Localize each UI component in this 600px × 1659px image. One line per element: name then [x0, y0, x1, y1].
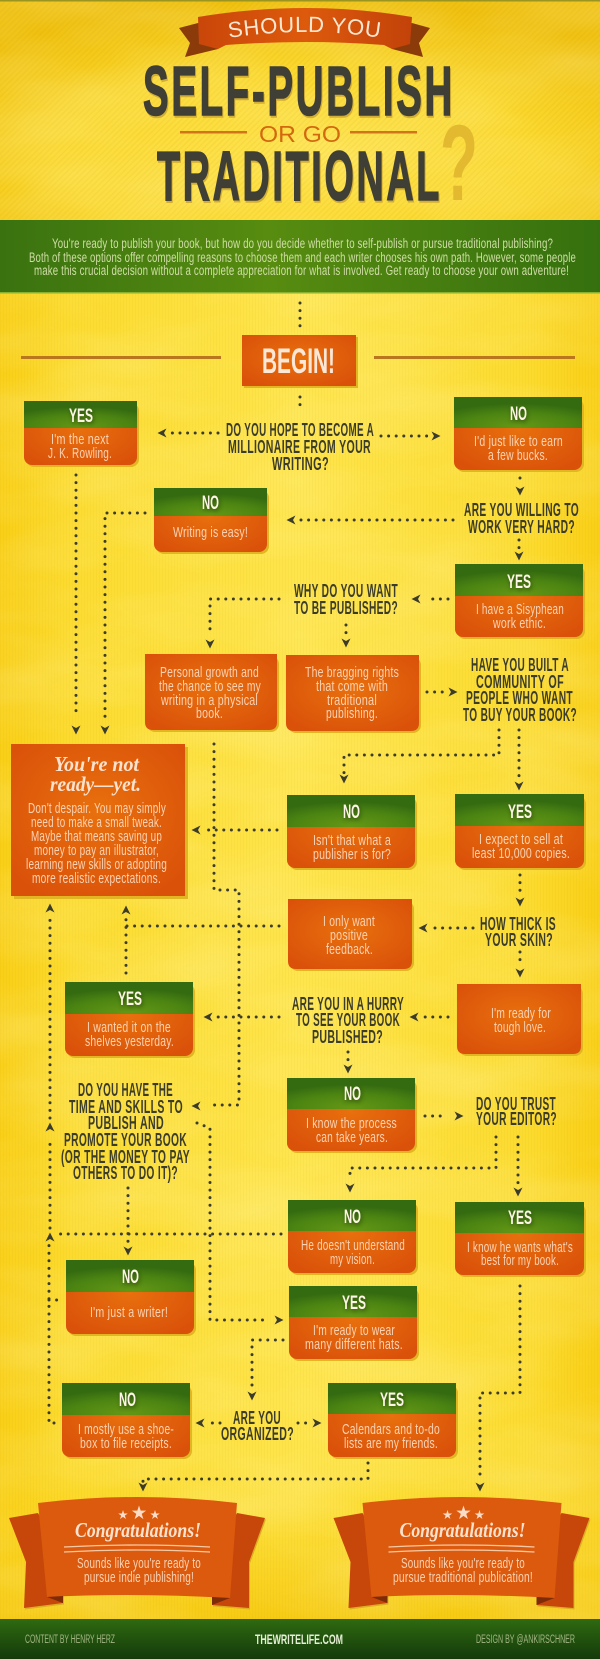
- heading: you're not ready: [50, 752, 141, 796]
- arrow: to personal growth: [206, 599, 279, 648]
- title ribbon: should you: [179, 8, 430, 57]
- connector: start: [298, 303, 302, 328]
- arrow: organized no: [196, 1418, 220, 1428]
- box: bragging rights: publishing.: [326, 706, 378, 722]
- box: bragging rights: that come with: [316, 679, 388, 695]
- box: no publisher: publisher is for?: [313, 847, 391, 863]
- box: yes sisyphean: work ethic.: [492, 616, 546, 632]
- arrow: feedback to not ready: [122, 906, 279, 973]
- box: no receipts: box to file receipts.: [80, 1436, 172, 1452]
- box: yes yesterday: shelves yesterday.: [85, 1034, 174, 1050]
- outer arrow: middle: [46, 1122, 54, 1228]
- outer arrow: upper: [46, 904, 54, 1118]
- box: personal growth: book.: [196, 706, 223, 722]
- text: indie message: [77, 1556, 201, 1586]
- question: time and skills: DO YOU HAVE THE: [78, 1079, 173, 1100]
- box: positive feedback: [288, 899, 414, 971]
- arrow: [427, 688, 458, 696]
- question: time and skills: TIME AND SKILLS TO: [69, 1096, 183, 1117]
- box: positive feedback: feedback.: [326, 942, 373, 958]
- box: yes copies: YES: [508, 801, 532, 823]
- heading: congratulations: Congratulations!: [400, 1518, 526, 1542]
- box: yes rowling: [24, 401, 139, 467]
- heading: you're not ready: ready—yet.: [50, 772, 141, 796]
- box: positive feedback: positive: [330, 928, 368, 944]
- arrow: to no publisher: [340, 730, 499, 784]
- arrow: rowling to not ready: [72, 475, 80, 734]
- body text: Don't despair. You may simply: [28, 801, 166, 817]
- box: yes sisyphean: [455, 564, 585, 639]
- box: yes calendars: [328, 1383, 458, 1459]
- begin box: [242, 335, 358, 388]
- arrow: skills to just a writer: [124, 1188, 132, 1256]
- arrow: editor no: [346, 1137, 496, 1192]
- arrow: to yes copies: [514, 730, 524, 790]
- box: no receipts: [62, 1383, 192, 1459]
- box: no writing is easy: NO: [202, 492, 219, 514]
- box: no publisher: [287, 795, 417, 870]
- box: no writing is easy: Writing is easy!: [173, 525, 248, 541]
- begin box: BEGIN!: [262, 342, 335, 381]
- arrow: [410, 1012, 448, 1022]
- box: no vision: my vision.: [330, 1252, 375, 1268]
- text: traditional message: Sounds like you're ready to: [401, 1556, 525, 1572]
- box: no receipts: I mostly use a shoe-: [78, 1422, 174, 1438]
- arrow: to yes rowling: [158, 428, 218, 438]
- box: no bucks: [454, 397, 584, 472]
- box: personal growth: writing in a physical: [160, 693, 258, 709]
- arrow: easy to not ready: [100, 513, 145, 734]
- box: no publisher: Isn't that what a: [313, 833, 391, 849]
- box: no publisher: NO: [343, 801, 360, 823]
- arrow: organized yes: [298, 1418, 322, 1428]
- box: bragging rights: traditional: [327, 693, 377, 709]
- text: indie message: pursue indie publishing!: [84, 1570, 194, 1586]
- arrow: editor yes: [514, 1137, 522, 1196]
- arrow: [516, 478, 524, 496]
- question: time and skills: OTHERS TO DO IT)?: [73, 1162, 178, 1183]
- box: yes rowling: YES: [69, 405, 93, 427]
- box: bragging rights: The bragging rights: [305, 665, 399, 681]
- question: millionaire: [226, 419, 374, 474]
- box: tough love: [457, 984, 583, 1056]
- banner: traditional publication: [334, 1497, 590, 1610]
- box: personal growth: Personal growth and: [160, 665, 259, 681]
- box: no just a writer: I'm just a writer!: [90, 1305, 168, 1321]
- arrow: [516, 875, 524, 906]
- box: yes sisyphean: YES: [507, 571, 531, 593]
- banner: indie publishing: [9, 1497, 266, 1610]
- question: time and skills: [61, 1079, 190, 1183]
- body text: need to make a small tweak.: [31, 815, 162, 831]
- divider right: [374, 356, 575, 359]
- box: no process: [287, 1078, 417, 1153]
- divider left: [21, 356, 221, 359]
- arrow: [412, 594, 448, 604]
- text: traditional message: pursue traditional publication!: [393, 1570, 533, 1586]
- box: no bucks: NO: [510, 403, 527, 425]
- credit: site: THEWRITELIFE.COM: [255, 1631, 343, 1647]
- box: no receipts: NO: [119, 1389, 136, 1411]
- question: hurry: PUBLISHED?: [312, 1026, 383, 1047]
- arrow: calendars to indie: [138, 1463, 368, 1492]
- box: no bucks: a few bucks.: [488, 448, 548, 464]
- arrow: no vision to outer: [46, 1232, 281, 1242]
- box: yes rowling: J. K. Rowling.: [48, 446, 112, 462]
- question: millionaire: MILLIONAIRE FROM YOUR: [228, 436, 371, 457]
- panel: not ready yet: [11, 744, 188, 899]
- box: no process: can take years.: [316, 1130, 388, 1146]
- arrow: to writing is easy: [286, 516, 453, 524]
- question: hurry: TO SEE YOUR BOOK: [296, 1009, 400, 1030]
- question: organized: ARE YOU: [233, 1407, 281, 1428]
- box: yes copies: I expect to sell at: [479, 832, 563, 848]
- box: positive feedback: I only want: [323, 914, 375, 930]
- box: no writing is easy: [154, 488, 269, 554]
- box: no just a writer: [66, 1260, 196, 1336]
- box: no just a writer: NO: [122, 1266, 139, 1288]
- text: traditional message: [393, 1556, 533, 1586]
- box: bragging rights: [286, 655, 421, 733]
- box: no vision: [288, 1200, 418, 1275]
- box: yes many hats: I'm ready to wear: [313, 1323, 395, 1339]
- text: should you: SHOULD YOU: [229, 16, 380, 38]
- question: hurry: [292, 993, 404, 1047]
- box: yes best for book: [455, 1202, 586, 1277]
- question: time and skills: PROMOTE YOUR BOOK: [64, 1129, 187, 1150]
- heading: you're not ready: You're not: [54, 752, 140, 776]
- box: yes many hats: [289, 1286, 419, 1361]
- box: no process: I know the process: [306, 1116, 397, 1132]
- question: community: [463, 654, 577, 725]
- question: why published: WHY DO YOU WANT: [294, 580, 398, 601]
- outer arrow: lower: [49, 1245, 57, 1423]
- body text: more realistic expectations.: [32, 871, 161, 887]
- arrow: [514, 540, 524, 560]
- heading: congratulations: Congratulations!: [75, 1518, 201, 1542]
- arrow: [418, 924, 473, 932]
- box: yes calendars: lists are my friends.: [344, 1436, 438, 1452]
- question: work hard: [464, 499, 579, 537]
- stars: [443, 1506, 484, 1519]
- subtitle: or go: OR GO: [259, 121, 341, 147]
- box: personal growth: [145, 654, 279, 732]
- box: yes best for book: best for my book.: [481, 1253, 559, 1269]
- question: why published: [294, 580, 398, 618]
- intro band: [0, 220, 600, 294]
- arrow: to bragging rights: [342, 625, 350, 648]
- stars: [118, 1506, 160, 1519]
- question: organized: [221, 1407, 294, 1444]
- question: millionaire: WRITING?: [272, 453, 329, 474]
- box: yes many hats: YES: [342, 1292, 366, 1314]
- box: tough love: tough love.: [494, 1020, 546, 1036]
- arrow: hurry to yes: [204, 1012, 279, 1022]
- box: yes yesterday: YES: [118, 988, 142, 1010]
- body text: money to pay an illustrator,: [34, 843, 159, 859]
- box: yes copies: [455, 794, 586, 870]
- box: personal growth: the chance to see my: [159, 679, 261, 695]
- box: yes yesterday: [65, 982, 195, 1058]
- question: millionaire: DO YOU HOPE TO BECOME A: [226, 419, 374, 440]
- arrow: to no bucks: [381, 432, 440, 440]
- box: no vision: NO: [344, 1206, 361, 1228]
- box: no bucks: I'd just like to earn: [474, 434, 563, 450]
- arrow: [425, 1112, 464, 1120]
- arrow: best for book to traditional: [476, 1286, 520, 1492]
- question: organized: ORGANIZED?: [221, 1423, 294, 1444]
- arrow: hats to organized: [248, 1340, 283, 1400]
- body text: learning new skills or adopting: [26, 857, 167, 873]
- question: trust editor: [476, 1093, 557, 1129]
- box: yes rowling: I'm the next: [51, 432, 109, 448]
- question: time and skills: (OR THE MONEY TO PAY: [61, 1146, 190, 1167]
- box: yes calendars: YES: [380, 1389, 404, 1411]
- connector: [298, 397, 302, 412]
- box: no vision: He doesn't understand: [301, 1238, 405, 1254]
- box: yes best for book: YES: [508, 1207, 532, 1229]
- intro text: [29, 236, 576, 278]
- question: time and skills: PUBLISH AND: [88, 1112, 164, 1133]
- box: yes calendars: Calendars and to-do: [342, 1422, 440, 1438]
- arrow: [516, 952, 524, 978]
- arrow: [344, 1052, 352, 1074]
- body text: [26, 801, 167, 887]
- question: hurry: ARE YOU IN A HURRY: [292, 993, 404, 1014]
- credit: content: CONTENT BY HENRY HERZ: [25, 1634, 115, 1646]
- body text: Maybe that means saving up: [31, 829, 162, 845]
- box: no process: NO: [344, 1083, 361, 1105]
- arrow: skills to many hats: [197, 1123, 284, 1324]
- box: yes yesterday: I wanted it on the: [87, 1020, 171, 1036]
- question: why published: TO BE PUBLISHED?: [294, 597, 398, 618]
- text: indie message: Sounds like you're ready to: [77, 1556, 201, 1572]
- footer: [0, 1619, 600, 1659]
- arrow: personal growth to time and skills: [192, 744, 239, 1110]
- box: yes many hats: many different hats.: [305, 1337, 403, 1353]
- box: tough love: I'm ready for: [491, 1006, 551, 1022]
- arrow: no publisher to not ready: [192, 826, 277, 834]
- question: thick skin: [480, 913, 556, 950]
- question mark: ?: [440, 102, 478, 223]
